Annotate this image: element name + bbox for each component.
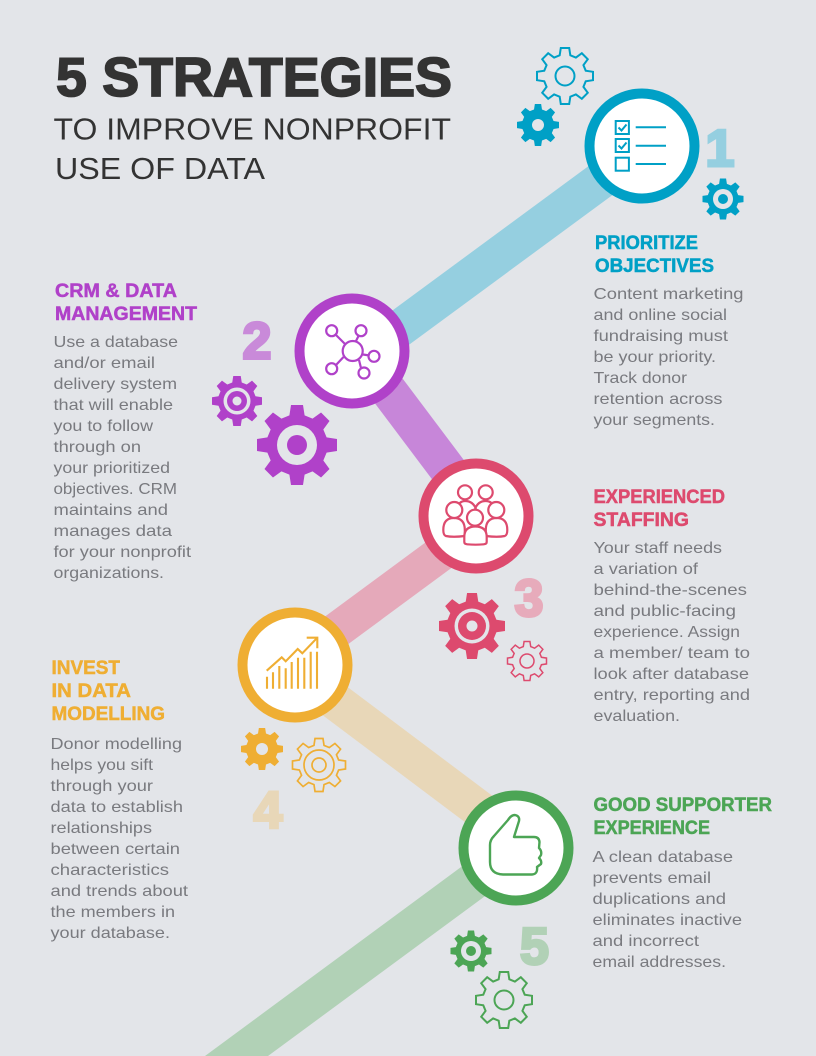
text block: step 1 body — [594, 286, 744, 429]
step 4 group — [50, 612, 348, 942]
heading: experienced staffing: STAFFING — [594, 510, 689, 531]
step 3 group — [424, 464, 750, 725]
text block: step 4 body: your database. — [50, 925, 170, 942]
title line: to improve nonprofit: TO IMPROVE NONPROFIT — [54, 112, 451, 146]
text block: step 3 body: Your staff needs — [594, 540, 722, 557]
text block: step 1 body: and online social — [594, 307, 727, 324]
circle badge with people icon — [424, 464, 528, 568]
heading: good supporter experience: GOOD SUPPORTER — [594, 795, 772, 816]
circle badge with network icon — [300, 298, 404, 404]
number 2: 2 — [243, 312, 271, 370]
heading: prioritize objectives: PRIORITIZE — [595, 233, 698, 254]
text block: step 3 body: a member/ team to — [594, 645, 750, 662]
number 4: 4 — [254, 782, 283, 840]
text block: step 3 body: experience. Assign — [594, 624, 740, 641]
text block: step 5 body: A clean database — [592, 849, 733, 866]
text block: step 4 body: and trends about — [50, 883, 189, 900]
icon: small ring gear — [212, 376, 262, 426]
icon: solid gear — [241, 728, 283, 770]
connector band: step 5 to page bottom — [205, 838, 530, 1056]
text block: step 3 body: evaluation. — [594, 708, 680, 725]
text block: step 2 body — [54, 334, 192, 582]
text block: step 1 body: Track donor — [594, 370, 688, 387]
heading: invest in data modelling: IN DATA — [52, 681, 131, 702]
icon: checklist — [616, 121, 666, 171]
heading: invest in data modelling — [52, 658, 165, 725]
text block: step 4 body: between certain — [50, 841, 180, 858]
text block: step 4 body: the members in — [50, 904, 175, 921]
connector band: step 2 to 3 — [352, 342, 476, 507]
circle badge with growth chart icon — [242, 612, 348, 718]
icon: outline gear — [508, 642, 546, 680]
text block: step 2 body: manages data — [54, 523, 172, 540]
heading: invest in data modelling: MODELLING — [52, 704, 165, 725]
connector band: step 3 to 4 — [295, 528, 476, 661]
text block: step 1 body: retention across — [594, 391, 722, 408]
text block: step 4 body — [50, 736, 189, 942]
heading: invest in data modelling: INVEST — [52, 658, 120, 679]
text block: step 2 body: objectives. CRM — [54, 481, 177, 498]
text block: step 2 body: Use a database — [54, 334, 178, 351]
connector band: step 4 to 5 — [295, 671, 516, 837]
heading: prioritize objectives: OBJECTIVES — [595, 256, 714, 277]
text block: step 5 body: email addresses. — [592, 954, 726, 971]
heading: good supporter experience — [594, 795, 772, 839]
circle badge with thumbs up icon — [464, 796, 568, 900]
circle badge with checklist icon — [590, 94, 694, 198]
text block: step 2 body: through on — [54, 439, 141, 456]
text block: step 2 body: maintains and — [54, 502, 168, 519]
text block: step 2 body: organizations. — [54, 565, 164, 582]
icon: outline gear — [476, 972, 532, 1028]
text block: step 1 body: fundraising must — [594, 328, 729, 345]
icon: network nodes — [326, 325, 380, 378]
text block: step 2 body: and/or email — [54, 355, 155, 372]
icon: ring gear — [439, 593, 505, 659]
text block: step 4 body: helps you sift — [50, 757, 154, 774]
icon: ring gear — [702, 178, 744, 220]
heading: crm and data management — [55, 281, 197, 325]
text block: step 5 body: eliminates inactive — [592, 912, 742, 929]
text block: step 2 body: you to follow — [54, 418, 153, 435]
number 1: 1 — [706, 120, 734, 178]
text block: step 3 body: a variation of — [594, 561, 699, 578]
text block: step 1 body: Content marketing — [594, 286, 744, 303]
step 5 group — [450, 795, 772, 1028]
icon: outline gear — [292, 738, 346, 792]
icon: outline gear — [537, 48, 593, 104]
icon: solid gear — [517, 104, 559, 146]
icon: ring gear — [450, 930, 492, 972]
text block: step 4 body: data to establish — [50, 799, 183, 816]
text block: step 4 body: relationships — [50, 820, 152, 837]
heading: prioritize objectives — [595, 233, 714, 277]
icon: large ring gear — [257, 405, 337, 485]
title — [54, 46, 452, 186]
text block: step 2 body: delivery system — [54, 376, 177, 393]
connector band: step 1 to 2 — [352, 150, 642, 364]
text block: step 4 body: through your — [50, 778, 154, 795]
heading: crm and data management: CRM & DATA — [55, 281, 177, 302]
icon: group of people — [443, 485, 507, 545]
text block: step 5 body — [592, 849, 742, 971]
heading: crm and data management: MANAGEMENT — [55, 304, 197, 325]
text block: step 3 body: behind-the-scenes — [594, 582, 747, 599]
heading: experienced staffing: EXPERIENCED — [594, 487, 725, 508]
text block: step 2 body: for your nonprofit — [54, 544, 192, 561]
title line: 5 strategies: 5 STRATEGIES — [56, 46, 452, 108]
heading: good supporter experience: EXPERIENCE — [594, 818, 710, 839]
heading: experienced staffing — [594, 487, 725, 531]
title line: use of data: USE OF DATA — [55, 151, 265, 186]
number 3: 3 — [515, 570, 543, 628]
icon: growth chart — [267, 638, 317, 689]
number 5: 5 — [520, 918, 549, 976]
step 2 group — [54, 281, 404, 582]
text block: step 3 body: look after database — [594, 666, 749, 683]
text block: step 1 body: your segments. — [594, 412, 715, 429]
text block: step 3 body: and public-facing — [594, 603, 736, 620]
text block: step 2 body: that will enable — [54, 397, 173, 414]
text block: step 5 body: duplications and — [592, 891, 726, 908]
text block: step 3 body — [594, 540, 750, 725]
step 1 group — [517, 48, 744, 429]
text block: step 4 body: characteristics — [50, 862, 169, 879]
text block: step 2 body: your prioritized — [54, 460, 170, 477]
text block: step 5 body: prevents email — [592, 870, 711, 887]
text block: step 1 body: be your priority. — [594, 349, 716, 366]
text block: step 5 body: and incorrect — [592, 933, 700, 950]
icon: thumbs up — [490, 815, 541, 874]
text block: step 4 body: Donor modelling — [50, 736, 182, 753]
text block: step 3 body: entry, reporting and — [594, 687, 750, 704]
